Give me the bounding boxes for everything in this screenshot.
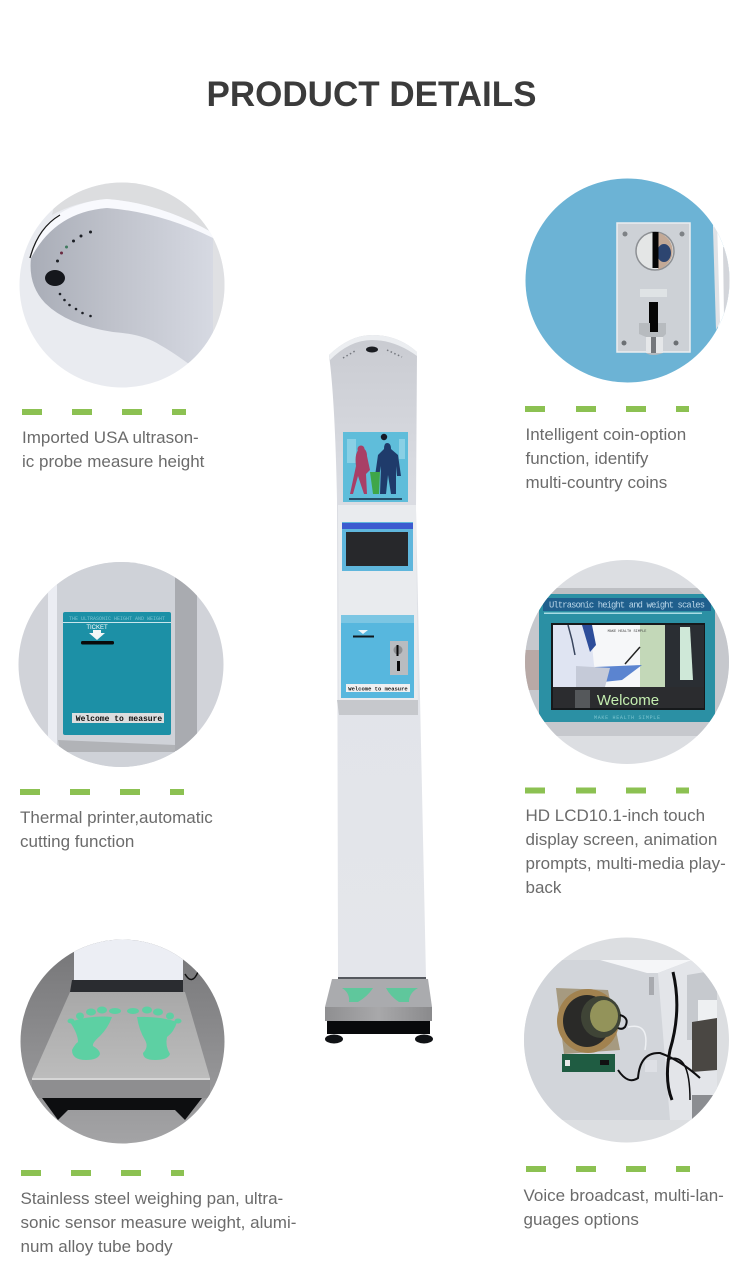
printer and coin module	[341, 615, 414, 698]
green dashes	[22, 409, 186, 415]
coin plate	[617, 223, 690, 352]
caption: prompts, multi-media play-	[526, 854, 726, 873]
caption: display screen, animation	[526, 830, 717, 849]
screen	[551, 623, 705, 710]
photo: printer panel: TICKET	[86, 625, 108, 631]
photo: coin acceptor close-up	[524, 178, 732, 384]
panel: voice broadcast	[523, 936, 731, 1229]
printer and coin module: Welcome to measure	[348, 686, 408, 692]
icon: probe lens	[45, 270, 65, 286]
teal frame	[539, 594, 715, 722]
panel: central product	[325, 335, 433, 1044]
caption: ic probe measure height	[22, 452, 205, 471]
caption: Stainless steel weighing pan, ultra-	[20, 1189, 283, 1208]
caption: multi-country coins	[526, 473, 667, 492]
right footprint	[127, 1006, 182, 1060]
panel: thermal printer	[18, 561, 224, 851]
circuit board	[562, 1054, 615, 1072]
weighing base	[325, 979, 433, 1044]
sensor and dots	[343, 346, 402, 358]
caption: function, identify	[526, 449, 649, 468]
speaker	[556, 988, 621, 1054]
caption: num alloy tube body	[20, 1237, 173, 1256]
touch screen module	[342, 522, 413, 571]
panel: weighing pan	[19, 939, 296, 1256]
caption: guages options	[524, 1210, 639, 1229]
left footprint	[68, 1006, 121, 1060]
green dashes	[525, 406, 689, 412]
photo: ultrasonic probe close-up	[19, 180, 230, 388]
photo: printer panel: Welcome to measure	[76, 715, 162, 724]
caption: Imported USA ultrason-	[22, 428, 199, 447]
green dashes	[21, 1170, 184, 1176]
photo: LCD screen	[524, 559, 730, 765]
photo: LCD screen: MAKE HEALTH SIMPLE	[608, 630, 646, 634]
photo: steel pan with footprints	[19, 939, 227, 1145]
indicator dots	[56, 230, 92, 317]
green dashes	[20, 789, 184, 795]
panel: ultrasonic probe	[19, 180, 230, 471]
caption: HD LCD10.1-inch touch	[526, 806, 705, 825]
photo: printer panel	[18, 561, 224, 769]
height chart poster	[343, 432, 408, 502]
wires	[618, 972, 700, 1100]
welcome text: Welcome	[597, 692, 659, 709]
caption: cutting function	[20, 832, 134, 851]
photo: LCD screen: MAKE HEALTH SIMPLE	[594, 715, 660, 721]
panel: coin option	[524, 178, 732, 492]
photo: printer panel: THE ULTRASONIC HEIGHT AND WEIGHT	[69, 616, 165, 622]
caption: Voice broadcast, multi-lan-	[524, 1186, 724, 1205]
photo: LCD screen: Ultrasonic height and weight scales	[549, 600, 705, 610]
green dashes	[525, 788, 689, 794]
caption: sonic sensor measure weight, alumi-	[20, 1213, 296, 1232]
caption: back	[526, 878, 562, 897]
electronics housing	[338, 505, 418, 715]
green dashes	[526, 1166, 690, 1172]
title: PRODUCT DETAILS	[207, 75, 536, 114]
caption: Intelligent coin-option	[526, 425, 686, 444]
teal ticket panel	[63, 612, 171, 735]
caption: Thermal printer,automatic	[20, 808, 213, 827]
panel: touch display	[524, 559, 730, 897]
photo: speaker inside cabinet	[523, 936, 731, 1144]
tower body	[329, 335, 426, 978]
